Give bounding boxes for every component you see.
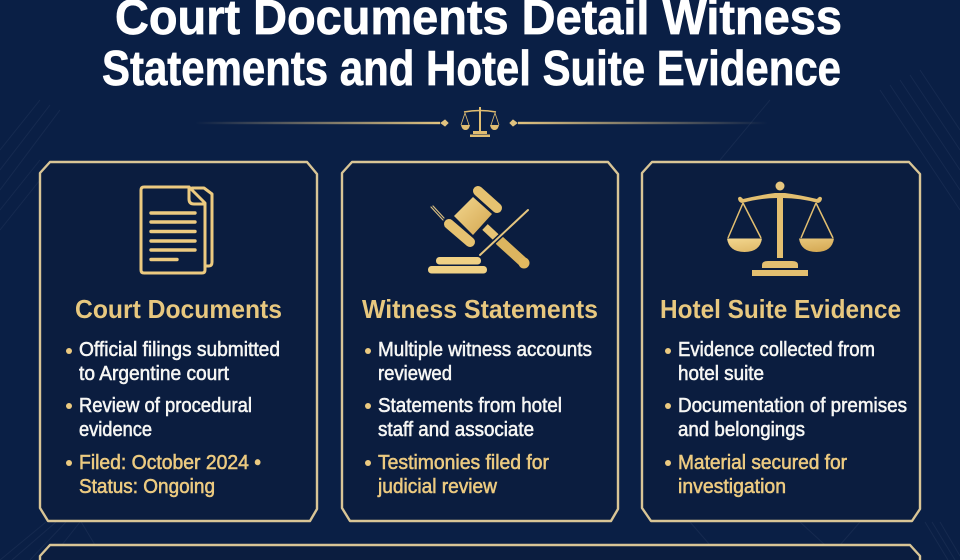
bullet list: Documentation of premises (678, 395, 907, 417)
bullet list: to Argentine court (79, 363, 229, 385)
panel: court documents (40, 162, 317, 521)
icon: documents (141, 187, 212, 273)
divider with scales icon (195, 107, 768, 137)
bullet list (66, 339, 280, 498)
heading: Hotel Suite Evidence (660, 294, 901, 324)
bullet list: Testimonies filed for (378, 452, 549, 474)
heading: Witness Statements (362, 294, 598, 324)
icon: gavel (428, 191, 530, 274)
bullet list: Status: Ongoing (79, 476, 215, 498)
bullet list (665, 339, 907, 498)
bullet list: Official filings submitted (79, 339, 280, 361)
heading: Court Documents (75, 294, 282, 324)
bullet list: hotel suite (678, 363, 764, 385)
bullet list: Material secured for (678, 452, 847, 474)
panel: hotel suite evidence (642, 162, 920, 521)
title: Statements and Hotel Suite Evidence (102, 42, 841, 96)
bullet list: evidence (79, 419, 152, 441)
panel: bottom summary (40, 545, 920, 560)
icon: scales (727, 182, 834, 276)
bullet list: judicial review (377, 476, 498, 498)
bullet list: Evidence collected from (678, 339, 875, 361)
panel: witness statements (342, 162, 618, 521)
bullet list: reviewed (378, 363, 452, 385)
bullet list: Multiple witness accounts (378, 339, 592, 361)
bullet list: Statements from hotel (378, 395, 562, 417)
bullet list: Filed: October 2024 • (79, 452, 261, 474)
bullet list: investigation (678, 476, 786, 498)
bullet list: Review of procedural (79, 395, 252, 417)
bullet list (365, 339, 592, 498)
bullet list: and belongings (678, 419, 805, 441)
bullet list: staff and associate (378, 419, 534, 441)
title (102, 0, 842, 96)
